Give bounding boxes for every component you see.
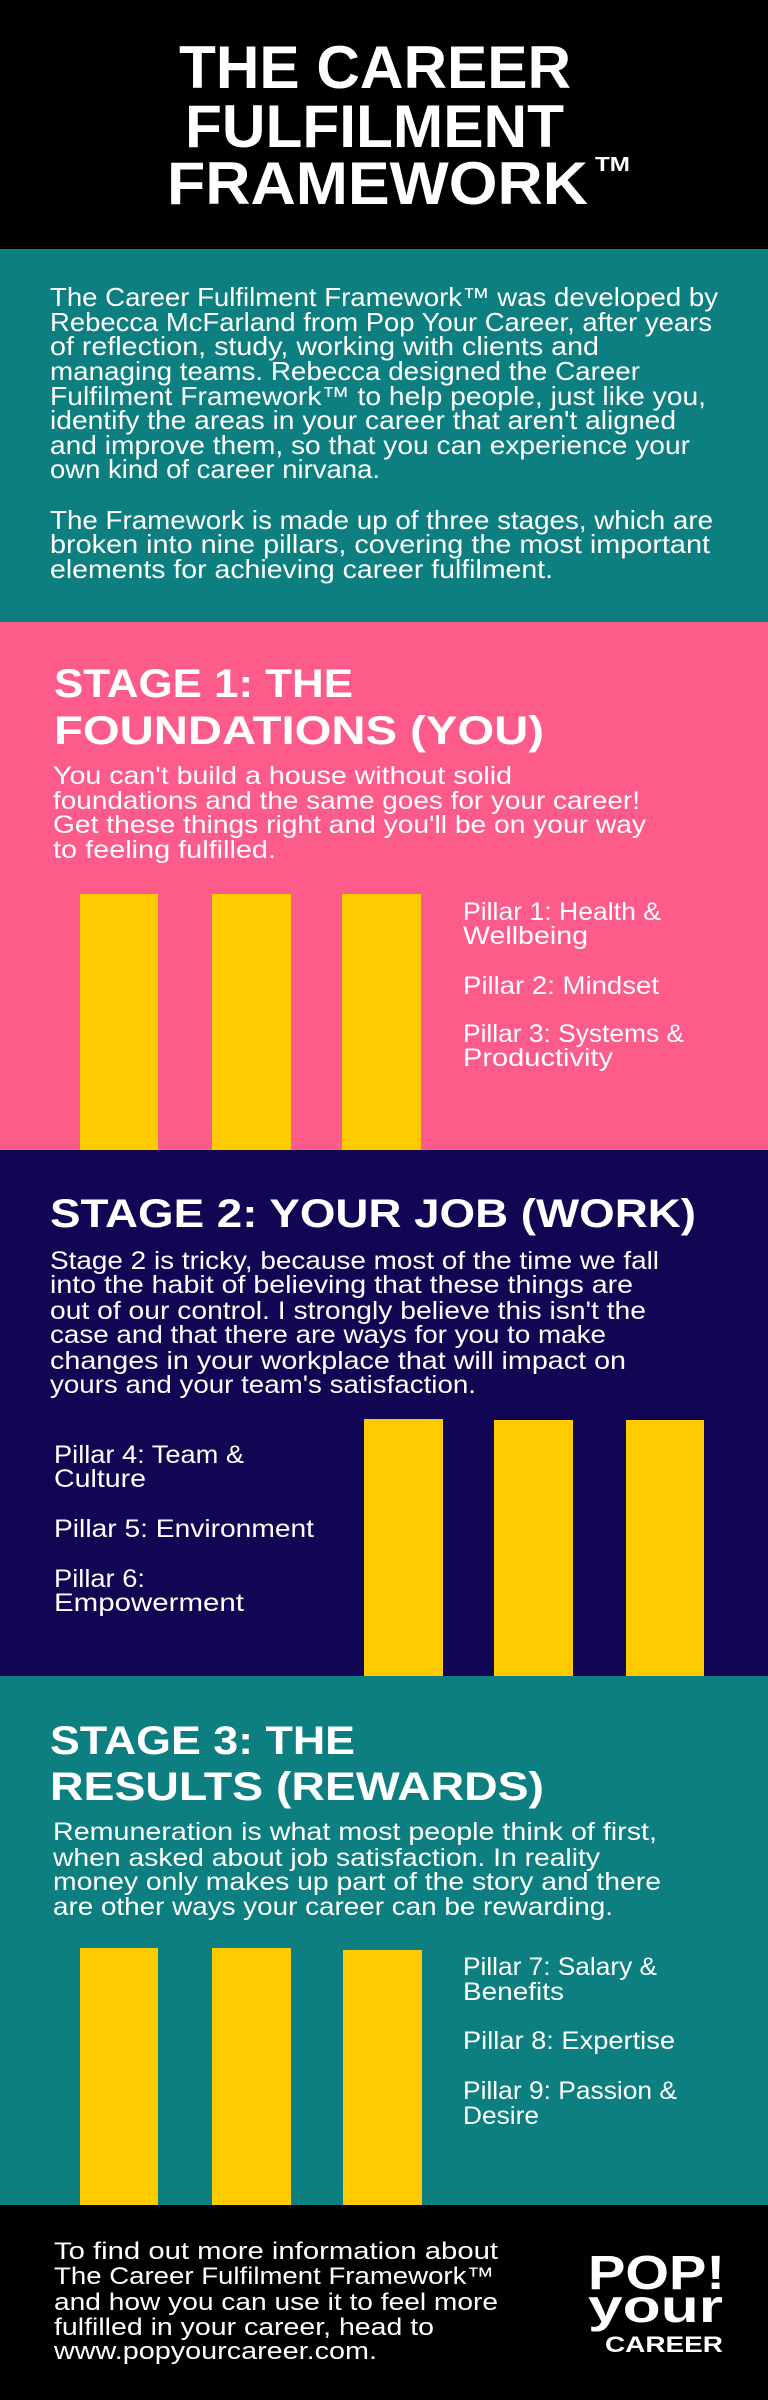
pillar labels: 1-3: Pillar 1: Health &: [463, 898, 661, 926]
title: TM: [595, 154, 630, 176]
intro text: [50, 282, 718, 584]
text: stage 1 description: foundations and the same goes for your career!: [53, 787, 640, 815]
panel: footer: [0, 2205, 768, 2400]
panel: intro: [0, 249, 768, 622]
text: stage 3 description: money only makes up part of the story and there: [53, 1868, 661, 1896]
text: stage 1 description: Get these things right and you'll be on your way: [53, 811, 647, 839]
heading: stage 1: [54, 662, 544, 753]
text: stage 2 description: into the habit of believing that these things are: [50, 1271, 633, 1299]
text: stage 2 description: case and that there are ways for you to make: [50, 1321, 606, 1349]
pillar labels: 7-9: Pillar 7: Salary &: [463, 1953, 657, 1981]
pillar labels: 1-3: Wellbeing: [463, 922, 588, 950]
intro text: elements for achieving career fulfilment.: [50, 554, 553, 584]
heading: stage 2: STAGE 2: YOUR JOB (WORK): [50, 1192, 696, 1236]
pillar labels: 1-3: Productivity: [463, 1044, 614, 1072]
heading: stage 3: RESULTS (REWARDS): [50, 1765, 544, 1809]
title: FRAMEWORK: [167, 150, 588, 217]
heading: stage 3: [50, 1719, 544, 1809]
pillars: stage 3 bars: [80, 1948, 422, 2205]
intro text: of reflection, study, working with clients and: [50, 331, 599, 361]
text: stage 3 description: Remuneration is what most people think of first,: [53, 1818, 657, 1846]
logo: pop your career: POP!: [588, 2247, 725, 2300]
pillar labels: 7-9: Desire: [463, 2102, 539, 2130]
logo: pop your career: CAREER: [605, 2332, 723, 2357]
text: stage 2 description: Stage 2 is tricky, because most of the time we fall: [50, 1247, 659, 1275]
pillar labels: 4-6: [54, 1441, 314, 1617]
footer text: fulfilled in your career, head to: [54, 2314, 434, 2341]
heading: stage 1: FOUNDATIONS (YOU): [54, 709, 544, 753]
pillar labels: 4-6: Empowerment: [54, 1589, 244, 1617]
title: [167, 34, 630, 217]
intro text: The Framework is made up of three stages, which are: [50, 505, 713, 535]
pillar labels: 7-9: Pillar 9: Passion &: [463, 2077, 677, 2105]
title: THE CAREER: [179, 34, 571, 101]
footer text: [53, 2238, 498, 2365]
intro text: broken into nine pillars, covering the most important: [50, 529, 711, 559]
intro text: identify the areas in your career that aren't aligned: [50, 405, 676, 435]
pillar labels: 7-9: Benefits: [463, 1978, 564, 2006]
panel: stage 3: [0, 1676, 768, 2205]
panel: stage 1: [0, 622, 768, 1150]
pillar labels: 4-6: Pillar 5: Environment: [54, 1515, 314, 1543]
pillar labels: 4-6: Pillar 4: Team &: [54, 1441, 244, 1469]
footer text: www.popyourcareer.com.: [53, 2338, 377, 2365]
pillars: stage 2 bars: [364, 1419, 704, 1676]
text: stage 3 description: are other ways your career can be rewarding.: [53, 1893, 613, 1921]
text: stage 2 description: changes in your workplace that will impact on: [50, 1347, 626, 1375]
intro text: Rebecca McFarland from Pop Your Career, after years: [50, 307, 712, 337]
text: stage 3 description: [52, 1818, 661, 1921]
heading: stage 3: STAGE 3: THE: [50, 1719, 355, 1763]
footer text: and how you can use it to feel more: [54, 2289, 498, 2316]
title: FULFILMENT: [185, 93, 564, 160]
logo: pop your career: [588, 2247, 725, 2357]
heading: stage 1: STAGE 1: THE: [54, 662, 353, 706]
text: stage 3 description: when asked about job satisfaction. In reality: [52, 1844, 601, 1872]
intro text: own kind of career nirvana.: [50, 454, 380, 484]
text: stage 2 description: yours and your team's satisfaction.: [50, 1371, 476, 1399]
intro text: and improve them, so that you can experience your: [50, 430, 690, 460]
footer text: The Career Fulfilment Framework™: [54, 2263, 494, 2290]
pillar labels: 4-6: Culture: [54, 1465, 146, 1493]
text: stage 2 description: out of our control. I strongly believe this isn't the: [50, 1297, 646, 1325]
panel: stage 2: [0, 1150, 768, 1676]
text: stage 1 description: to feeling fulfilled.: [53, 836, 276, 864]
footer text: To find out more information about: [54, 2238, 498, 2265]
text: stage 1 description: [53, 762, 647, 864]
pillar labels: 7-9: Pillar 8: Expertise: [463, 2027, 675, 2055]
text: stage 2 description: [50, 1247, 659, 1399]
intro text: The Career Fulfilment Framework™ was developed by: [50, 282, 718, 312]
panel: header: [0, 0, 768, 249]
logo: pop your career: your: [588, 2280, 723, 2332]
pillar labels: 7-9: [463, 1953, 677, 2130]
pillar labels: 1-3: Pillar 2: Mindset: [463, 972, 659, 1000]
pillar labels: 1-3: [463, 898, 684, 1072]
intro text: managing teams. Rebecca designed the Career: [50, 356, 640, 386]
pillars: stage 1 bars: [80, 894, 421, 1150]
pillar labels: 1-3: Pillar 3: Systems &: [463, 1020, 684, 1048]
intro text: Fulfilment Framework™ to help people, just like you,: [50, 381, 706, 411]
text: stage 1 description: You can't build a house without solid: [53, 762, 512, 790]
pillar labels: 4-6: Pillar 6:: [54, 1565, 145, 1593]
